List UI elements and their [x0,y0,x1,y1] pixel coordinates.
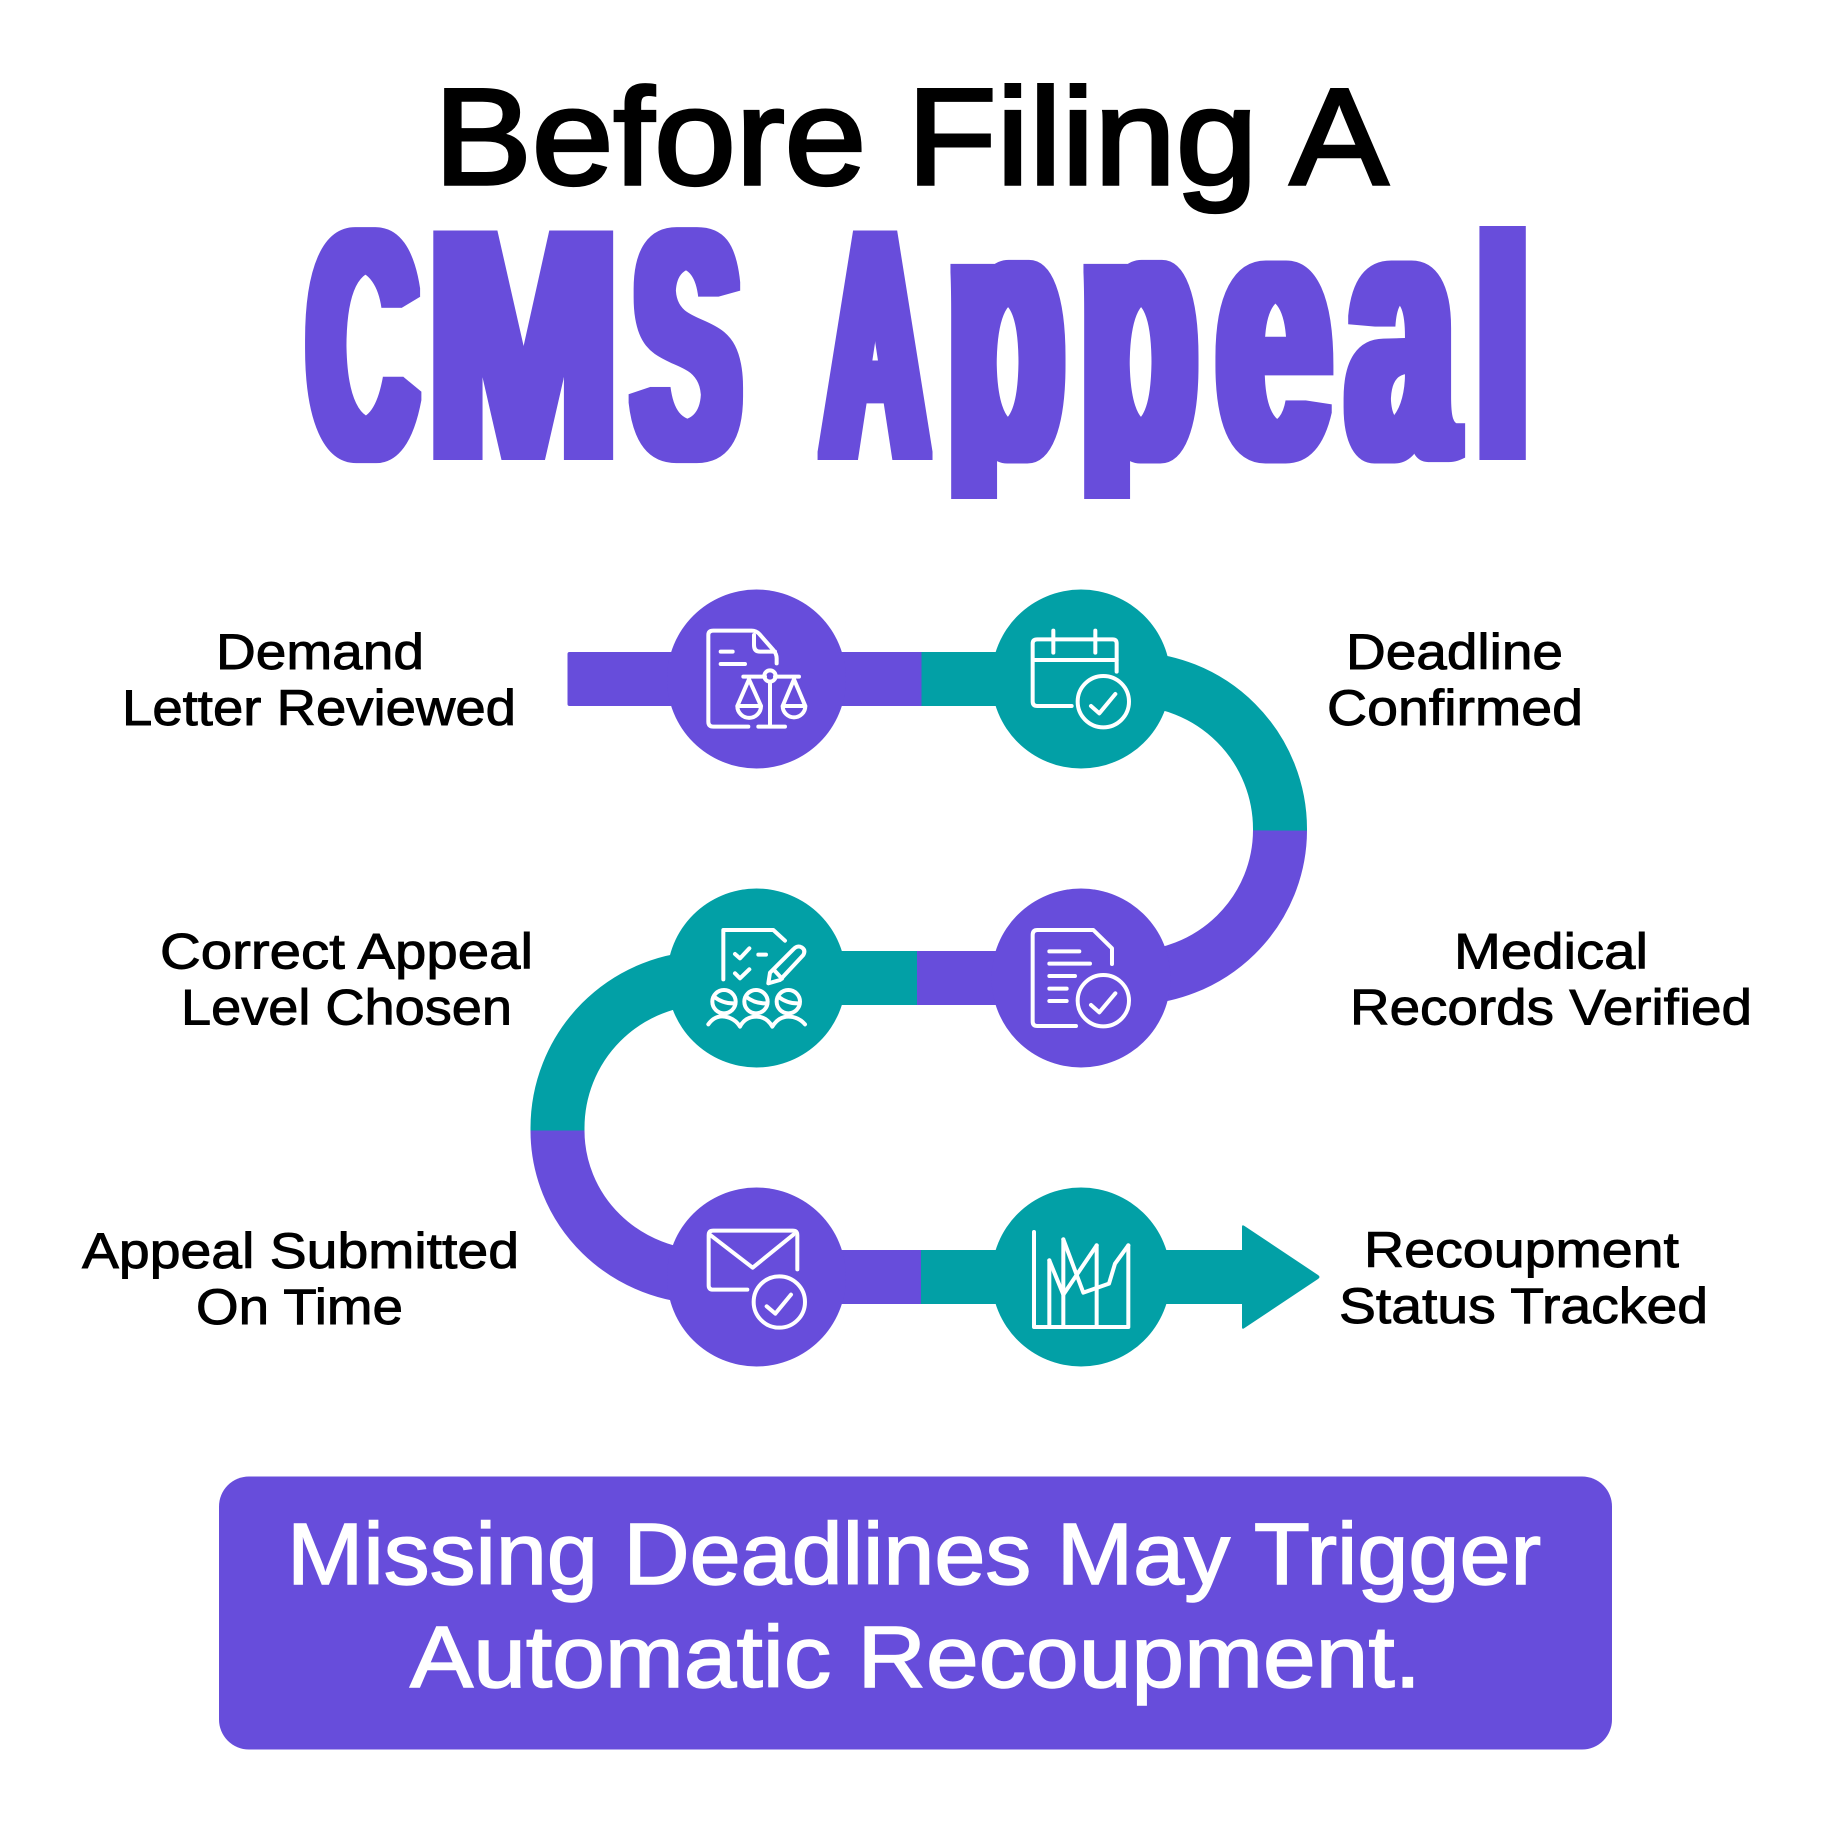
label: Appeal Submitted On Time [82,1223,519,1335]
path start cap [568,652,588,706]
icon: document check [1033,930,1129,1026]
title: Before Filing A: Before Filing A [434,61,1389,214]
label: Deadline Confirmed: Confirmed [1327,680,1583,736]
icon: chart [1034,1232,1128,1327]
label: Deadline Confirmed [1327,624,1583,736]
title: CMS Appeal: S [634,164,739,525]
label: Recoupment Status Tracked: Recoupment [1364,1222,1679,1278]
path segment: row 2 teal and left arc top [558,978,917,1131]
title: CMS Appeal: p [1081,135,1196,534]
label: Recoupment Status Tracked [1339,1222,1708,1334]
icon: envelope check [709,1231,805,1328]
label: Medical Records Verified [1350,924,1752,1036]
step 2 circle with icon: calendar check [992,590,1170,768]
callout text [287,1506,1541,1706]
title: CMS Appeal: p [948,135,1063,534]
path segment: left arc bottom and row 3 purple [558,1130,922,1277]
title: CMS Appeal: a [1348,136,1455,532]
callout banner [219,1476,1612,1750]
callout text: Automatic Recoupment. [410,1609,1421,1706]
arrow head [1242,1225,1320,1329]
label: Demand Letter Reviewed [122,624,516,736]
icon: calendar check [1033,631,1129,727]
title: CMS Appeal: C [309,165,416,525]
title: CMS Appeal: A [824,165,926,525]
label: Appeal Submitted On Time: On Time [196,1279,403,1335]
path segment: row 3 teal shaft [921,1250,1245,1304]
label: Correct Appeal Level Chosen [160,924,533,1036]
title: CMS Appeal [305,226,1526,499]
label: Correct Appeal Level Chosen: Level Chosen [181,980,512,1036]
label: Deadline Confirmed: Deadline [1346,624,1563,680]
label: Correct Appeal Level Chosen: Correct Appeal [160,924,533,980]
step 5 circle with icon: envelope check [667,1188,846,1366]
process path [558,679,1280,1277]
step 3 circle with icon: document check [992,888,1170,1068]
step 4 circle with icon: checklist and team [667,888,846,1068]
label: Medical Records Verified: Medical [1454,924,1648,980]
icon: document and scales [708,631,805,727]
label: Medical Records Verified: Records Verified [1350,980,1752,1036]
label: Demand Letter Reviewed: Demand [216,624,424,680]
icon: checklist and team [708,930,805,1027]
step 1 circle with icon: document and scales [667,590,846,768]
step 6 circle with icon: chart [992,1188,1170,1366]
title: CMS Appeal: M [428,165,618,525]
callout text: Missing Deadlines May Trigger [287,1506,1541,1603]
label: Recoupment Status Tracked: Status Tracked [1339,1278,1708,1334]
path segment: row 1 teal and right arc top [922,679,1280,831]
label: Demand Letter Reviewed: Letter Reviewed [122,680,516,736]
path segment: row 1 purple [570,652,922,706]
label: Appeal Submitted On Time: Appeal Submitted [82,1223,519,1279]
path segment: right arc bottom and row 2 purple [916,830,1280,978]
title: CMS Appeal: l [1476,134,1529,532]
title: CMS Appeal: e [1218,135,1330,532]
